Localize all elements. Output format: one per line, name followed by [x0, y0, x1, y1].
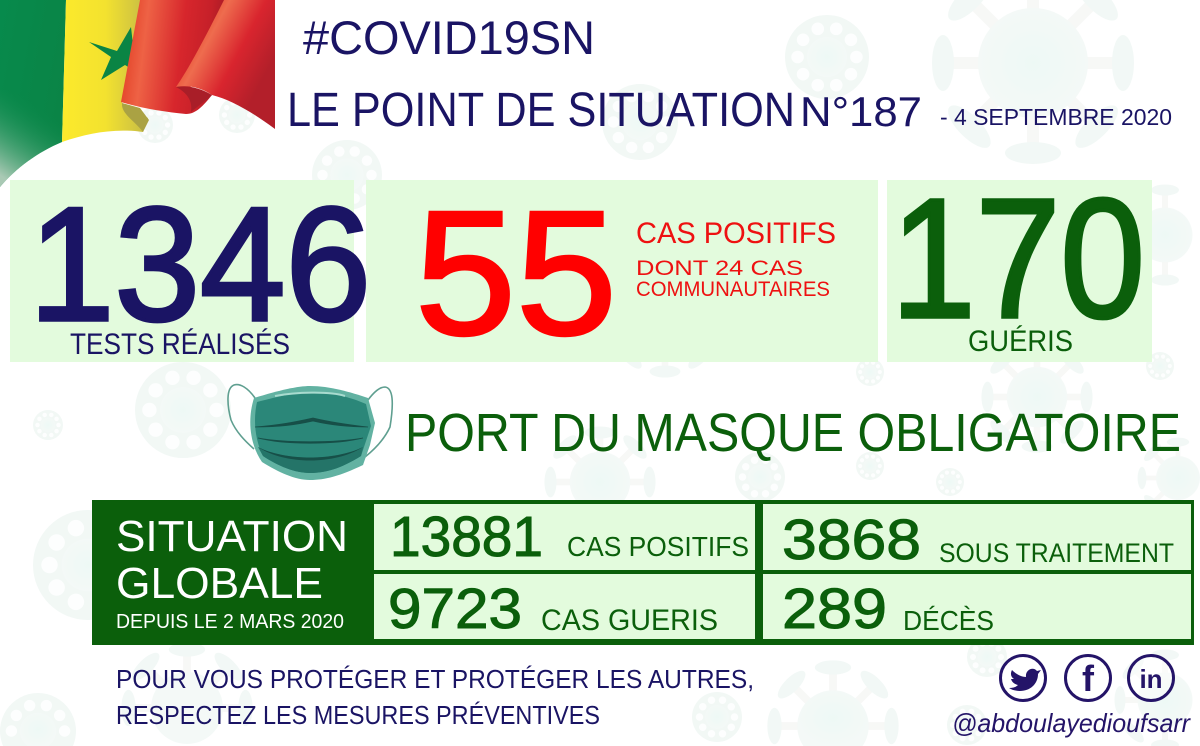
footer message line 2: RESPECTEZ LES MESURES PRÉVENTIVES: [116, 700, 600, 730]
stat cell: total positive: [374, 504, 755, 570]
panel: recovered: [887, 164, 1152, 362]
flag red fold left: [121, 0, 232, 114]
stat cell: under treatment: 3868: [782, 508, 921, 572]
flag yellow stripe: [62, 0, 148, 142]
flag green stripe: [0, 0, 66, 187]
flag red fold right: [176, 0, 275, 129]
positive number: 55: [415, 174, 617, 372]
stat cell: deaths: 289: [782, 577, 887, 641]
title main: LE POINT DE SITUATION: [287, 84, 795, 137]
stat cell: under treatment: [763, 504, 1191, 572]
icon: linkedin: [1128, 656, 1174, 700]
stat cell: under treatment: SOUS TRAITEMENT: [939, 538, 1174, 568]
flag fold shadow: [122, 103, 149, 132]
panel: tests: [10, 174, 371, 362]
recovered number: 170: [891, 164, 1145, 354]
stat cell: total positive: 13881: [390, 505, 543, 569]
stat cell: deaths: DÉCÈS: [903, 605, 994, 636]
stat cell: recovered total: CAS GUERIS: [541, 604, 718, 637]
footer message line 1: POUR VOUS PROTÉGER ET PROTÉGER LES AUTRES,: [116, 664, 754, 694]
icon: linkedin: in: [1139, 664, 1163, 694]
community label line 2: COMMUNAUTAIRES: [636, 278, 830, 301]
tests label: TESTS RÉALISÉS: [70, 328, 290, 361]
stat cell: deaths: [763, 574, 1191, 641]
stat cell: recovered total: [374, 574, 755, 641]
Senegal flag: [0, 0, 275, 187]
icon: facebook: [1066, 656, 1110, 700]
social handle: @abdoulayedioufsarr: [952, 708, 1191, 738]
panel: global situation: [92, 500, 1194, 645]
flag star: [89, 27, 136, 80]
global heading line 1: SITUATION: [116, 512, 348, 561]
tests number: 1346: [29, 174, 371, 355]
community label line 1: DONT 24 CAS: [636, 257, 803, 280]
stat cell: total positive: CAS POSITIFS: [567, 531, 749, 562]
global heading line 2: GLOBALE: [116, 559, 323, 608]
title hashtag: #COVID19SN: [303, 11, 595, 64]
title number: N°187: [800, 88, 922, 135]
icon: face mask: [228, 385, 392, 480]
panel: positive cases: [366, 174, 878, 372]
global subheading: DEPUIS LE 2 MARS 2020: [116, 611, 344, 633]
icon: facebook: f: [1082, 658, 1095, 699]
recovered label: GUÉRIS: [968, 325, 1073, 358]
flag red fold inner shadow: [176, 86, 212, 112]
icon: twitter: [1000, 656, 1046, 700]
stat cell: recovered total: 9723: [388, 577, 522, 641]
title date: - 4 SEPTEMBRE 2020: [940, 104, 1172, 130]
positive label: CAS POSITIFS: [636, 217, 836, 250]
